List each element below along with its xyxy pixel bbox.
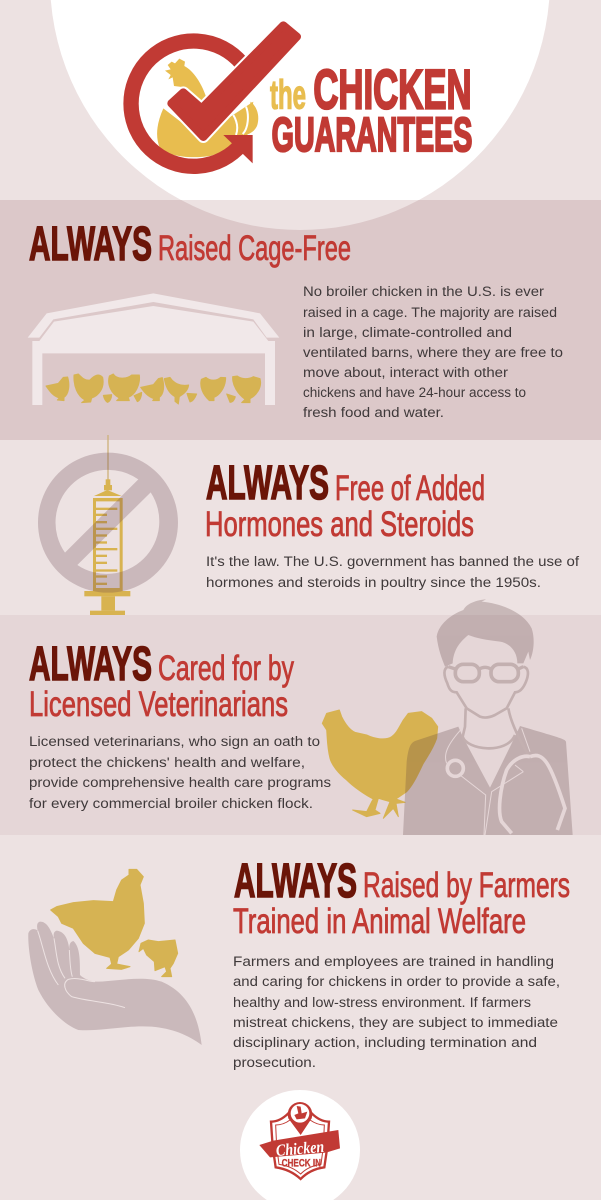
text: cage-free: chickens and have 24-hour access to bbox=[303, 385, 526, 401]
text: veterinarians: for every commercial broiler chicken flock. bbox=[29, 796, 313, 812]
heading: cage-free bbox=[29, 218, 351, 271]
icon: hen in logo bbox=[157, 59, 258, 157]
panel: licensed veterinarians bbox=[29, 599, 573, 835]
icon: check mark bbox=[171, 25, 297, 137]
text: cage-free: raised in a cage. The majority are raised bbox=[303, 305, 557, 321]
text: cage-free: fresh food and water. bbox=[303, 405, 444, 421]
text: farmers: mistreat chickens, they are subject to immediate bbox=[233, 1015, 558, 1031]
heading: farmers bbox=[233, 855, 570, 941]
text: farmers: disciplinary action, including termination and bbox=[233, 1035, 537, 1051]
icon: hand holding hen and chick bbox=[28, 869, 202, 1045]
heading: veterinarians: Cared for by bbox=[158, 649, 294, 688]
heading: cage-free: Raised Cage-Free bbox=[158, 229, 351, 268]
text: cage-free bbox=[303, 284, 563, 421]
text: hormones: hormones and steroids in poultry since the 1950s. bbox=[206, 575, 541, 591]
panel: farmers trained in animal welfare bbox=[28, 855, 570, 1071]
text: veterinarians: Licensed veterinarians, who sign an oath to bbox=[29, 734, 320, 750]
logo title: the bbox=[270, 71, 306, 117]
heading: hormones: ALWAYS bbox=[206, 457, 329, 510]
text: veterinarians bbox=[29, 734, 331, 812]
text: farmers: prosecution. bbox=[233, 1055, 316, 1071]
badge: chicken check in: Chicken bbox=[275, 1137, 325, 1160]
text: cage-free: in large, climate-controlled and bbox=[303, 325, 512, 341]
panel: free of added hormones bbox=[38, 435, 579, 615]
text: hormones bbox=[206, 554, 579, 591]
text: hormones: It's the law. The U.S. government has banned the use of bbox=[206, 554, 579, 570]
icon: syringe with prohibition sign bbox=[38, 435, 178, 615]
logo bbox=[131, 25, 472, 166]
icon: barn with chickens bbox=[28, 293, 279, 405]
text: cage-free: move about, interact with other bbox=[303, 365, 508, 381]
text: cage-free: No broiler chicken in the U.S. is ever bbox=[303, 284, 544, 300]
heading: cage-free: ALWAYS bbox=[29, 218, 152, 271]
heading: hormones: Free of Added bbox=[335, 469, 485, 508]
heading: farmers: ALWAYS bbox=[234, 855, 357, 908]
text: veterinarians: provide comprehensive health care programs bbox=[29, 775, 331, 791]
badge: chicken check in bbox=[240, 1090, 360, 1200]
text: farmers bbox=[233, 954, 560, 1071]
text: cage-free: ventilated barns, where they are free to bbox=[303, 345, 563, 361]
icon: ring arrow bbox=[131, 41, 242, 166]
icon: chicken and veterinarian bbox=[322, 599, 573, 835]
panel: raised cage-free bbox=[28, 218, 563, 421]
heading: hormones bbox=[205, 457, 485, 544]
badge: chicken check in: CHECK IN bbox=[282, 1157, 321, 1169]
logo title bbox=[270, 59, 472, 162]
text: veterinarians: protect the chickens' health and welfare, bbox=[29, 755, 305, 771]
heading: veterinarians: ALWAYS bbox=[29, 638, 152, 691]
logo title: GUARANTEES bbox=[272, 109, 472, 162]
text: farmers: healthy and low-stress environment. If farmers bbox=[233, 995, 531, 1011]
text: farmers: Farmers and employees are trained in handling bbox=[233, 954, 554, 970]
heading: hormones: Hormones and Steroids bbox=[205, 505, 474, 544]
heading: veterinarians: Licensed Veterinarians bbox=[29, 685, 288, 724]
logo title: CHICKEN bbox=[313, 59, 472, 121]
heading: veterinarians bbox=[29, 638, 294, 724]
text: farmers: and caring for chickens in order to provide a safe, bbox=[233, 974, 560, 990]
